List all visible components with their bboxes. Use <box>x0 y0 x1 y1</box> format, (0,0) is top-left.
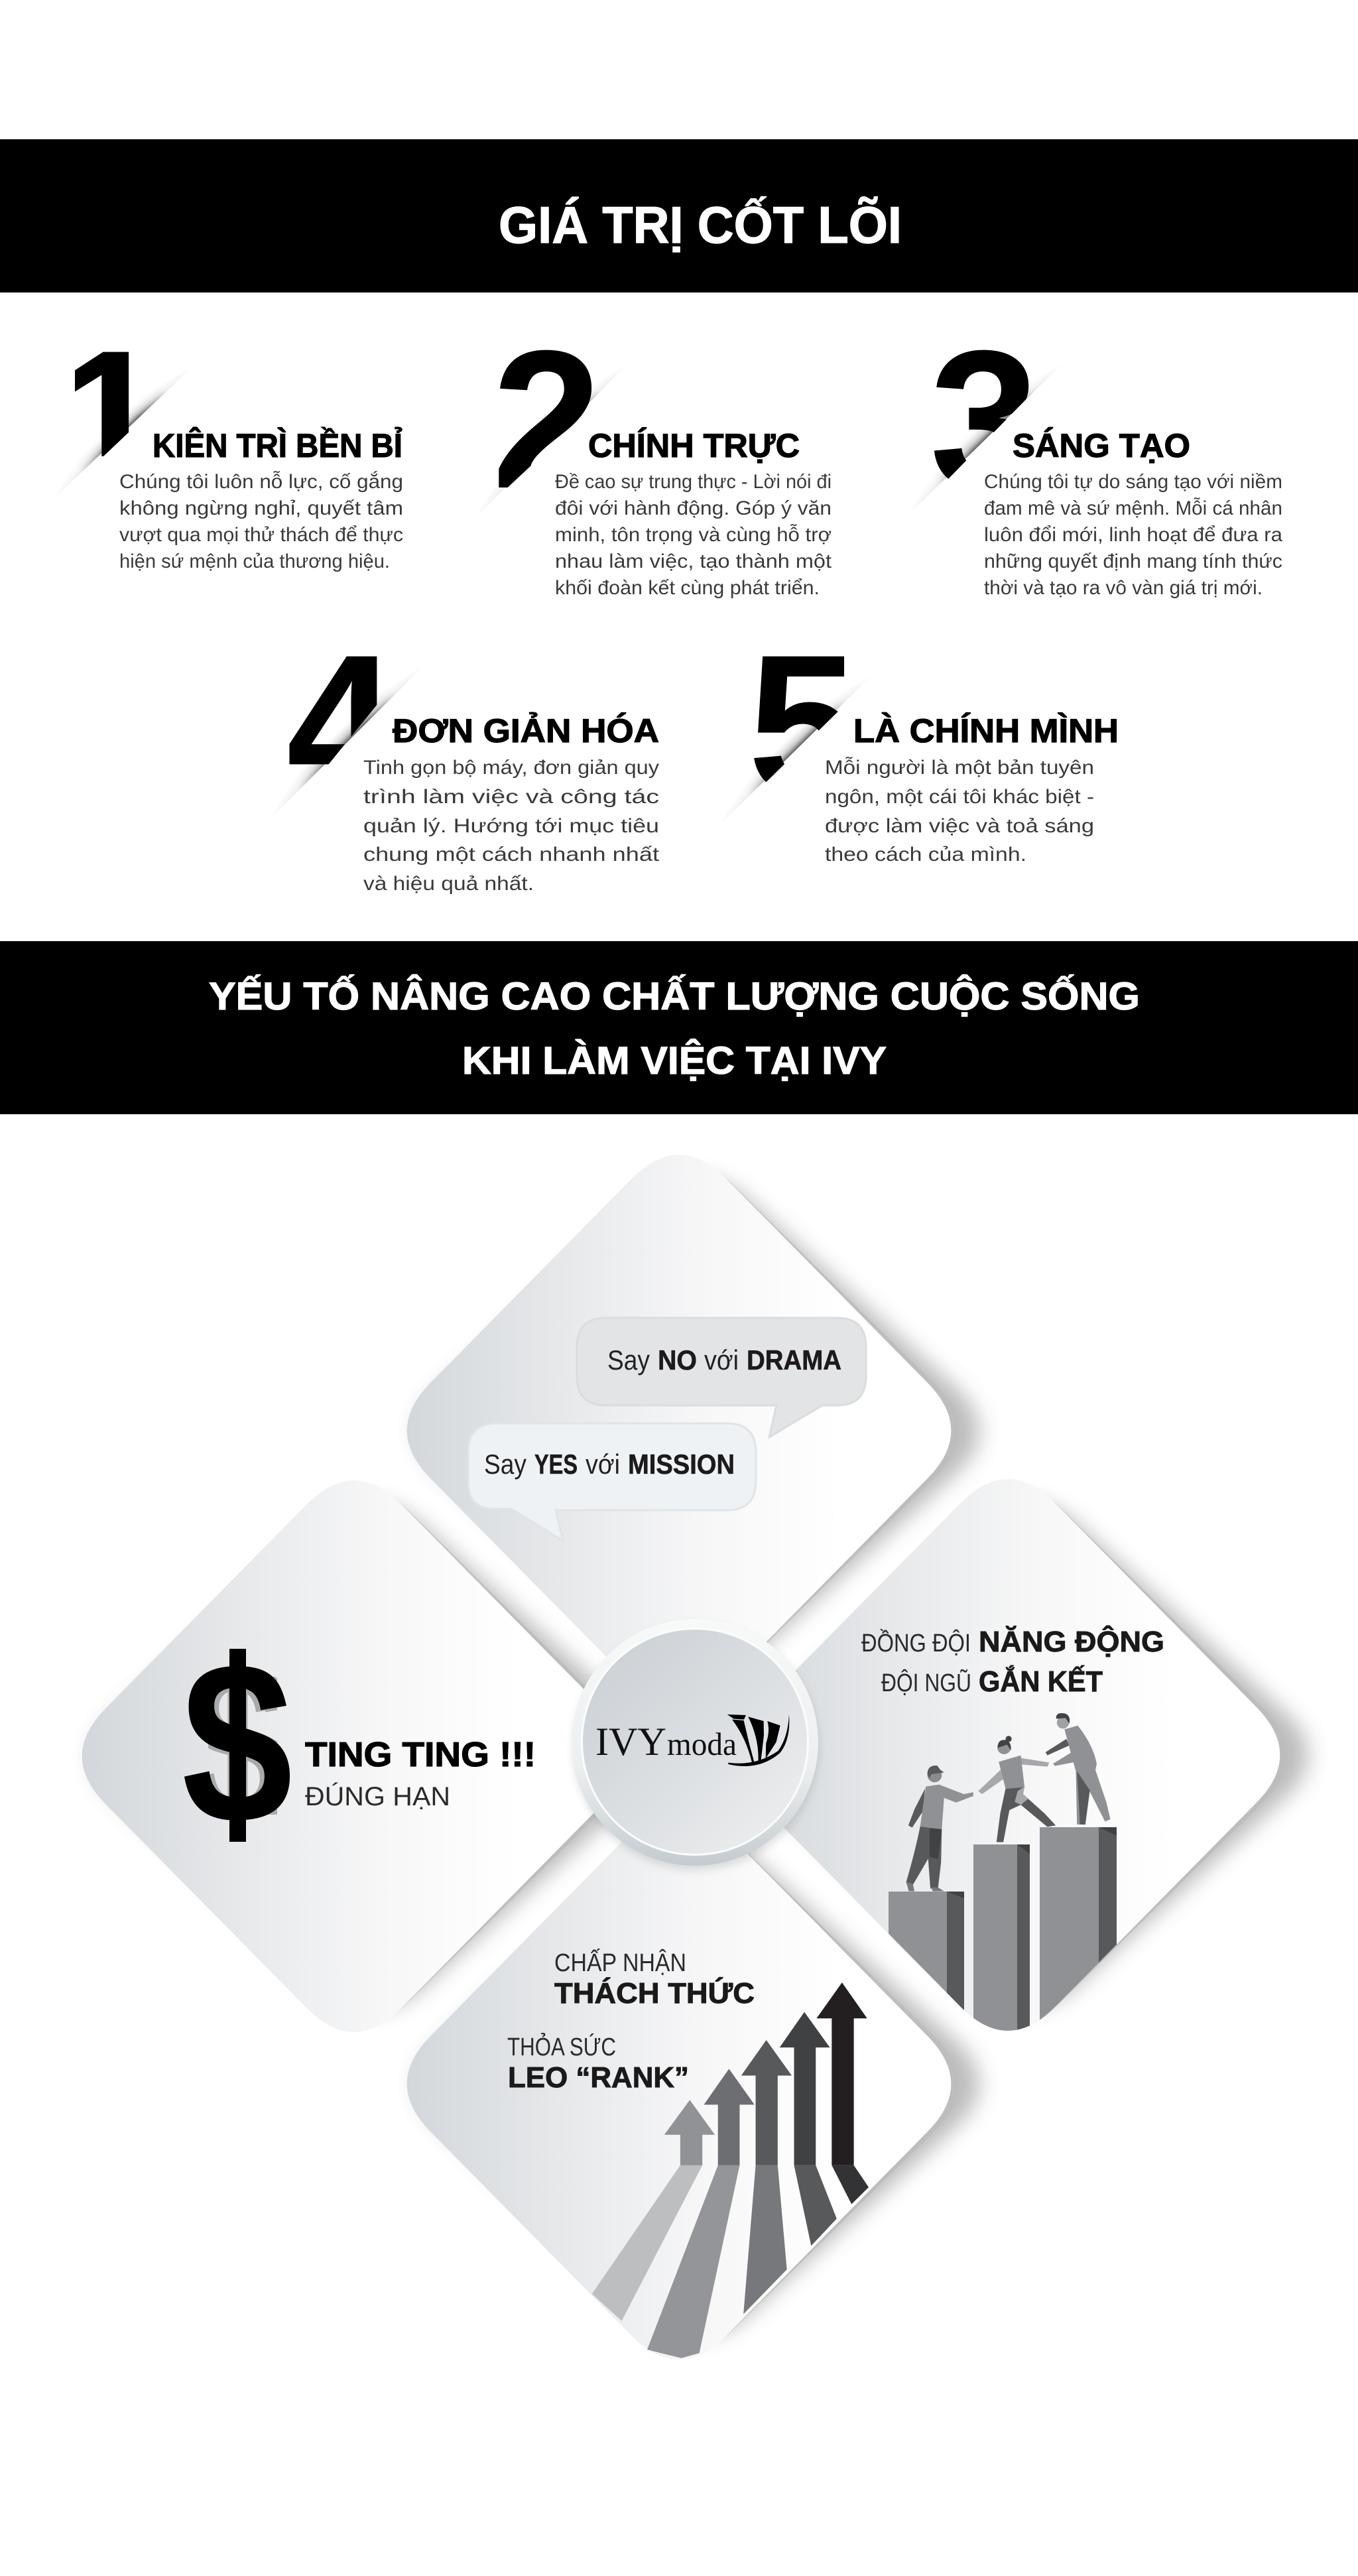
title line 2: KHI LÀM VIỆC TẠI IVY <box>462 1039 887 1082</box>
team text: GẮN KẾT <box>979 1665 1103 1698</box>
columns <box>889 1827 1117 2066</box>
challenge text: LEO “RANK” <box>508 2061 689 2094</box>
speech bubble yes mission: với <box>586 1449 620 1480</box>
title line 1: YẾU TỐ NÂNG CAO CHẤT LƯỢNG CUỘC SỐNG <box>209 975 1140 1018</box>
heading 5: LÀ CHÍNH MÌNH <box>853 712 1119 749</box>
body 2: khối đoàn kết cùng phát triển. <box>555 577 820 599</box>
number 3: 3 <box>930 309 1039 529</box>
team text <box>861 1624 1164 1698</box>
icon: dollar sign: $ <box>186 1615 297 1874</box>
icon: dollar sign: $ <box>177 1615 288 1874</box>
fold shadow 5 <box>719 675 873 826</box>
body 1 <box>119 471 403 572</box>
title: GIÁ TRỊ CỐT LÕI <box>499 196 902 254</box>
speech bubble no drama <box>577 1318 866 1437</box>
body 2: minh, tôn trọng và cùng hỗ trợ <box>555 524 832 546</box>
body 1: vượt qua mọi thử thách để thực <box>119 524 403 546</box>
heading 2: CHÍNH TRỰC <box>588 427 800 464</box>
body 3: thời và tạo ra vô vàn giá trị mới. <box>984 577 1263 599</box>
diamond card bottom <box>407 1808 951 2360</box>
speech bubble no drama: NO <box>658 1344 697 1376</box>
fold shadow 3 <box>919 373 1053 504</box>
team text: ĐỘI NGŨ <box>881 1668 971 1697</box>
speech bubble yes mission: MISSION <box>628 1449 735 1480</box>
heading 4: ĐƠN GIẢN HÓA <box>393 712 659 749</box>
logo wordmark: moda <box>667 1726 737 1762</box>
body 5: theo cách của mình. <box>825 844 1026 866</box>
body 4: và hiệu quả nhất. <box>363 873 534 895</box>
diamond shadows <box>82 1159 1308 2356</box>
body 5 <box>825 757 1094 866</box>
panel: value 5 <box>731 657 1117 861</box>
person middle <box>978 1736 1056 1842</box>
people helping each other <box>906 1713 1111 1891</box>
logo mark <box>727 1714 789 1766</box>
body 3 <box>984 471 1282 599</box>
body 3: những quyết định mang tính thức <box>984 550 1282 572</box>
body 2 <box>555 471 832 599</box>
number 5: 5 <box>748 613 857 834</box>
panel: top diamond mission <box>407 1155 951 1707</box>
body 4: trình làm việc và công tác <box>363 786 659 808</box>
ting ting text: TING TING !!! <box>305 1736 536 1774</box>
diamond card left <box>82 1480 626 2032</box>
body 2: Đề cao sự trung thực - Lời nói đi <box>555 471 832 493</box>
fold shadow 1 <box>64 377 182 489</box>
body 2: nhau làm việc, tạo thành một <box>555 550 832 572</box>
speech bubble no drama: với <box>704 1344 739 1376</box>
body 4 <box>363 757 660 895</box>
body 5: được làm việc và toả sáng <box>825 815 1094 837</box>
challenge text: CHẤP NHẬN <box>554 1948 686 1977</box>
challenge text: THÁCH THỨC <box>554 1976 755 2010</box>
arrow 3 <box>741 2040 792 2314</box>
body 3: luôn đổi mới, linh hoạt để đưa ra <box>984 524 1282 546</box>
person left <box>906 1766 973 1891</box>
arrow 4 <box>780 2012 837 2246</box>
panel: left diamond salary <box>82 1480 626 2032</box>
logo wordmark: IVY <box>595 1720 666 1764</box>
center badge with logo <box>572 1619 820 1870</box>
team text: ĐỒNG ĐỘI <box>861 1628 971 1657</box>
person right <box>1046 1713 1111 1825</box>
body 1: không ngừng nghỉ, quyết tâm <box>119 497 403 519</box>
body 3: đam mê và sứ mệnh. Mỗi cá nhân <box>984 497 1282 519</box>
speech bubble yes mission: Say <box>484 1449 526 1480</box>
number 4: 4 <box>286 613 397 834</box>
body 5: Mỗi người là một bản tuyên <box>825 757 1094 779</box>
heading 3: SÁNG TẠO <box>1013 427 1190 464</box>
fold shadow 2 <box>485 374 617 507</box>
logo wordmark <box>595 1720 737 1764</box>
arrow 5 <box>816 1982 869 2204</box>
panel: right diamond team <box>736 1479 1280 2066</box>
panel: header core values <box>0 139 1358 292</box>
body 1: Chúng tôi luôn nỗ lực, cố gắng <box>119 471 403 493</box>
panel: header quality of life <box>0 941 1358 1114</box>
body 2: đôi với hành động. Góp ý văn <box>555 497 832 519</box>
body 4: chung một cách nhanh nhất <box>363 844 660 866</box>
panel: value 3 <box>919 350 1282 598</box>
arrow 1 <box>592 2100 715 2321</box>
number 1: 1 <box>56 309 165 529</box>
diamond card right <box>736 1479 1280 2031</box>
icon: dollar sign: $ <box>182 1613 292 1872</box>
on time text: ĐÚNG HẠN <box>305 1781 450 1811</box>
panel: value 1 <box>64 352 403 572</box>
number 2: 2 <box>492 309 601 529</box>
panel: value 4 <box>280 657 659 894</box>
speech bubble yes mission <box>468 1423 756 1541</box>
body 4: Tinh gọn bộ máy, đơn giản quy <box>363 757 659 779</box>
body 1: hiện sứ mệnh của thương hiệu. <box>119 550 390 572</box>
rising arrows <box>592 1982 869 2358</box>
speech bubble no drama: Say <box>607 1344 650 1376</box>
body 5: ngôn, một cái tôi khác biệt - <box>825 786 1094 808</box>
heading 1: KIÊN TRÌ BỀN BỈ <box>153 427 402 464</box>
speech bubble yes mission: YES <box>534 1449 578 1480</box>
panel: bottom diamond challenge <box>407 1808 951 2360</box>
speech bubble no drama: DRAMA <box>747 1344 841 1376</box>
challenge text: THỎA SỨC <box>507 2032 616 2061</box>
body 4: quản lý. Hướng tới mục tiêu <box>363 815 659 837</box>
challenge text <box>507 1948 755 2094</box>
panel: value 2 <box>485 350 832 598</box>
fold shadow 4 <box>280 676 413 808</box>
body 3: Chúng tôi tự do sáng tạo với niềm <box>984 471 1282 493</box>
arrow 2 <box>647 2069 755 2358</box>
team text: NĂNG ĐỘNG <box>979 1624 1164 1658</box>
diamond card top <box>407 1155 951 1707</box>
